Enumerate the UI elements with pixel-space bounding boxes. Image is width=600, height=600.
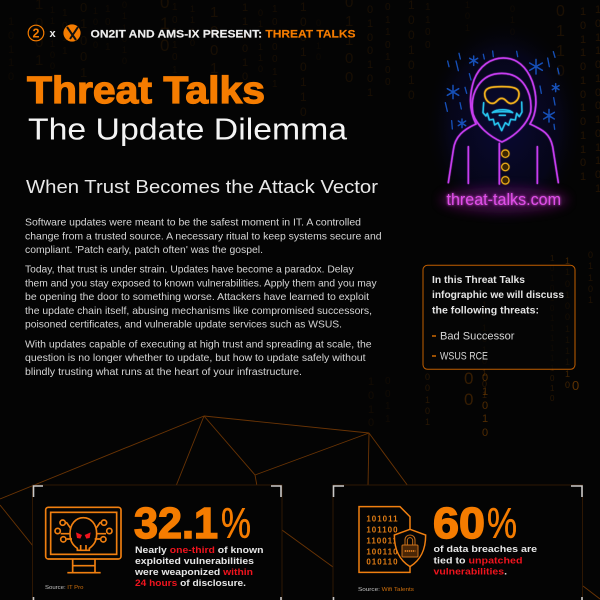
snowflakes (447, 56, 559, 128)
body text: compliant. 'Patch early, patch often' was the gospel. (25, 245, 263, 256)
stat value: 32.1 (134, 499, 218, 548)
multiply sign: x (50, 28, 56, 40)
background: binary digit rain: 1011010101101 (580, 6, 586, 183)
icon: binary document with shield lock: 110011 (366, 536, 398, 545)
background: binary digit rain: 010 (510, 4, 515, 36)
background: binary digit rain: 01001 (80, 0, 87, 80)
background: binary digit rain: 1100101 (242, 2, 248, 96)
background: binary digit rain: 1011 (62, 8, 68, 56)
body text: the update chain itself, abusing mechanisms like compromised successors, (25, 306, 372, 317)
header text: ON2IT AND AMS-IX PRESENT: THREAT TALKS (90, 28, 356, 40)
section heading: When Trust Becomes the Attack Vector (26, 176, 378, 197)
card corners (334, 486, 582, 600)
icon: ON2IT logo (28, 25, 44, 41)
source: Source: Wifi Talents (358, 587, 414, 593)
stat description (434, 543, 537, 576)
background: binary digit rain: 0 (572, 378, 579, 393)
card corners (34, 486, 281, 600)
stat description (134, 544, 264, 588)
background: binary digit rain: 0011 (385, 376, 391, 424)
stat value: % (221, 500, 251, 548)
background: binary digit rain: 1101001 (50, 5, 55, 82)
stat description: Nearly one-third of known (135, 544, 264, 555)
body text: With updates capable of executing at high trust and spreading at scale, the (25, 339, 372, 350)
body text: question is no longer whether to update, but how to update safely without (25, 353, 366, 364)
background: binary digit rain: 10010110 (300, 0, 307, 119)
background: binary digit rain: 00 (464, 369, 473, 409)
icon: monitor with skull (46, 507, 121, 573)
background: binary digit rain: 101101 (172, 2, 178, 76)
title: Threat Talks (27, 70, 265, 112)
network lines (0, 416, 600, 599)
body text: be opening the door to something worse. Attackers have learned to exploit (25, 292, 369, 303)
hood and coat (448, 58, 558, 184)
rain streaks (445, 51, 559, 129)
background: binary digit rain: 0100101 (367, 4, 373, 98)
body text: poisoned certificates, and vulnerable update services such as WSUS. (25, 320, 342, 331)
info box (423, 265, 575, 369)
background: binary digit rain: 01101 (588, 250, 593, 305)
background: binary digit rain: 101010101 (482, 300, 487, 400)
background: binary digit rain: 101 (465, 0, 470, 32)
background: binary digit rain: 00101 (425, 372, 430, 427)
icon: binary document with shield lock: 101011 (366, 515, 399, 524)
info box intro: the following threats: (432, 306, 539, 316)
header bar (28, 24, 356, 42)
stat card: 60% (333, 485, 582, 600)
background: binary digit rain: 1010011 (272, 4, 278, 90)
stat value: 60 (433, 499, 485, 548)
website label: threat-talks.com (446, 190, 561, 209)
threat list: WSUS RCE (440, 350, 488, 362)
goggles (485, 87, 519, 103)
stat description: exploited vulnerabilities (135, 555, 254, 566)
background: binary digit rain: 1001 (210, 4, 218, 77)
threat list: Bad Successor (440, 330, 515, 342)
stat description: of data breaches are (434, 543, 537, 554)
body text: change from a trusted source. A necessary ritual to keep systems secure and (25, 231, 382, 242)
background: binary digit rain: 0110 (556, 3, 565, 80)
hero: neon hooded figure (426, 20, 582, 230)
background: binary digit rain: 1100 (425, 2, 431, 50)
icon: ON2IT logo: 2 (33, 27, 40, 41)
body text: Today, that trust is under strain. Updates have become a paradox. Delay (25, 265, 355, 276)
background: binary digit rain: 011010 (122, 0, 127, 66)
info box intro: In this Threat Talks (432, 275, 525, 286)
stat description: tied to unpatched (434, 554, 523, 566)
background: binary digit rain: 110100111110 (565, 256, 570, 390)
background: binary digit rain: 1001010 (408, 0, 415, 102)
beard (483, 102, 522, 131)
background: binary digit rain: 1001 (105, 4, 111, 52)
background: binary digit rain: 1010 (368, 376, 374, 429)
background: binary digit rain: 1010 (93, 6, 98, 50)
background: binary digit rain: 0110 (316, 18, 321, 62)
stat card: 32.1% (32, 485, 282, 600)
background: binary digit rain: 010110 (258, 8, 263, 74)
body text (25, 218, 382, 378)
body text: Software updates were meant to be the safest moment in IT. A controlled (25, 218, 361, 229)
icon: binary document with shield lock: 101100 (366, 525, 399, 534)
stat value (433, 499, 517, 548)
icon: binary document with shield lock: 010110 (366, 557, 399, 566)
source: Source: IT Pro (45, 585, 84, 591)
icon: AMS-IX logo (63, 24, 81, 42)
background: binary digit rain: 10110 (8, 16, 14, 83)
icon: binary document with shield lock (359, 507, 426, 572)
background: binary digit rain: 0110100 (385, 2, 391, 88)
threat list (432, 330, 515, 362)
body text: blindly trusting what runs at the heart of your infrastructure. (25, 367, 302, 378)
stat value: % (487, 500, 517, 548)
info box intro (432, 275, 564, 316)
stat description: vulnerabilities . (434, 566, 507, 576)
background: binary digit rain: 1100 (190, 4, 195, 48)
buttons (502, 150, 509, 184)
background: binary digit rain: 101010111111010 (550, 254, 554, 403)
body text: them and you stay exposed to known vulnerabilities. Apply them and you may (25, 279, 377, 290)
stat description: 24 hours of disclosure. (135, 577, 246, 588)
background: binary digit rain: 01010 (482, 372, 488, 439)
icon: binary document with shield lock: 100110 (366, 547, 399, 556)
stat description: were weaponized within (134, 566, 253, 577)
info box intro: infographic we will discuss (432, 290, 564, 301)
subtitle: The Update Dilemma (28, 112, 347, 146)
